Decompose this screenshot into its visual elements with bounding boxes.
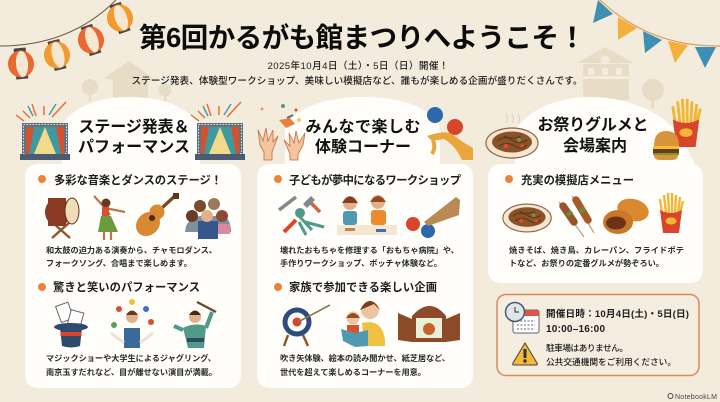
icon: archery target [282, 305, 330, 346]
panel: info box [497, 294, 699, 376]
body text: food: 焼きそば、焼き鳥、カレーパン、フライドポテ [509, 245, 684, 255]
text: parking notice [546, 342, 676, 367]
icon: children crafting [337, 195, 397, 235]
icon: stage right [191, 102, 245, 160]
icon: clapping hands and toy [258, 104, 305, 160]
icon: parent reading to child [341, 301, 385, 347]
body text: food [509, 245, 684, 268]
silhouette: school and tree [577, 47, 664, 108]
body text: performance: 南京玉すだれなど、目が離せない演目が満載。 [46, 367, 217, 377]
panel heading [306, 117, 420, 156]
panel heading: 会場案内 [563, 137, 627, 155]
lantern string decoration [0, 0, 137, 80]
panel heading: お祭りグルメと [538, 115, 648, 134]
intro text: ステージ発表、体験型ワークショップ、美味しい模擬店など、誰もが楽しめる企画が盛りだくさんです。 [132, 75, 582, 87]
body text: food: トなど、お祭りの定番グルメが勢ぞろい。 [509, 258, 664, 268]
bunting decoration [593, 0, 720, 68]
icon: boccia balls and ramp [406, 197, 460, 238]
body text: workshop: 壊れたおもちゃを修理する「おもちゃ病院」や、 [280, 245, 459, 255]
icon: french fries [660, 193, 683, 233]
icon: stage left [16, 102, 70, 160]
body text: workshop [280, 245, 459, 268]
icon: yakisoba [503, 204, 551, 232]
body text: family [280, 353, 450, 377]
text: date and time: 開催日時：10月4日(土)・5日(日) [546, 308, 689, 320]
panel heading [538, 115, 648, 155]
panel: stage and performance [16, 97, 245, 388]
subheading: family activities: 家族で参加できる楽しい企画 [289, 280, 437, 294]
NotebookLM mark: NotebookLM [675, 394, 717, 401]
subheading: music and dance: 多彩な音楽とダンスのステージ！ [54, 173, 222, 187]
icon: guitar [131, 193, 179, 241]
icon: hula dancer [94, 196, 125, 240]
body text: music: 和太鼓の迫力ある演奏から、チャモロダンス、 [46, 245, 217, 255]
body text: family: 世代を超えて楽しめるコーナーを用意。 [280, 367, 426, 377]
subheading: surprise and laughter: 驚きと笑いのパフォーマンス [53, 280, 200, 294]
icon: balls and slide [427, 107, 473, 160]
subheading: workshop: 子どもが夢中になるワークショップ [289, 173, 462, 187]
panel heading [78, 118, 190, 156]
icon: tools and robot [279, 196, 324, 235]
body text: family: 吹き矢体験、絵本の読み聞かせ、紙芝居など、 [280, 353, 450, 363]
panel: hands-on corner [257, 97, 473, 388]
icon: choir [185, 198, 231, 239]
icon: magic hat and cards [54, 302, 88, 348]
body text: workshop: 手作りワークショップ、ボッチャ体験など。 [280, 258, 442, 268]
icon: calendar and clock [506, 302, 539, 333]
icon: warning triangle [513, 343, 537, 365]
icon: fries [673, 99, 700, 147]
icon: curry bread [603, 195, 651, 234]
icon: burger [653, 131, 679, 160]
title: 第6回かるがも館まつりへようこそ！ [139, 22, 586, 53]
body text: performance [46, 353, 217, 377]
panel heading: ステージ発表＆ [78, 118, 190, 136]
icon: yakisoba plate [486, 114, 538, 158]
text: date and time [546, 308, 689, 335]
text: parking notice: 駐車場はありません。 [546, 342, 628, 353]
icon: juggler [111, 299, 154, 348]
silhouette: house and trees [82, 61, 172, 102]
panel: food and venue [486, 97, 703, 283]
panel heading: パフォーマンス [78, 138, 190, 156]
panel heading: みんなで楽しむ [306, 117, 420, 136]
icon: performer with pole [174, 302, 216, 348]
panel heading: 体験コーナー [315, 138, 411, 156]
text: date and time: 10:00–16:00 [546, 324, 605, 335]
date line: 2025年10月4日（土）・5日（日）開催！ [268, 60, 448, 72]
body text: performance: マジックショーや大学生によるジャグリング、 [46, 353, 216, 363]
icon: kamishibai theatre [398, 306, 460, 342]
body text: music [46, 245, 217, 268]
body text: music: フォークソング、合唱まで楽しめます。 [46, 258, 192, 268]
subheading: food stalls: 充実の模擬店メニュー [521, 173, 634, 187]
icon: yakitori skewers [559, 196, 594, 237]
text: parking notice: 公共交通機関をご利用ください。 [546, 356, 676, 367]
icon: taiko drum [45, 198, 79, 238]
